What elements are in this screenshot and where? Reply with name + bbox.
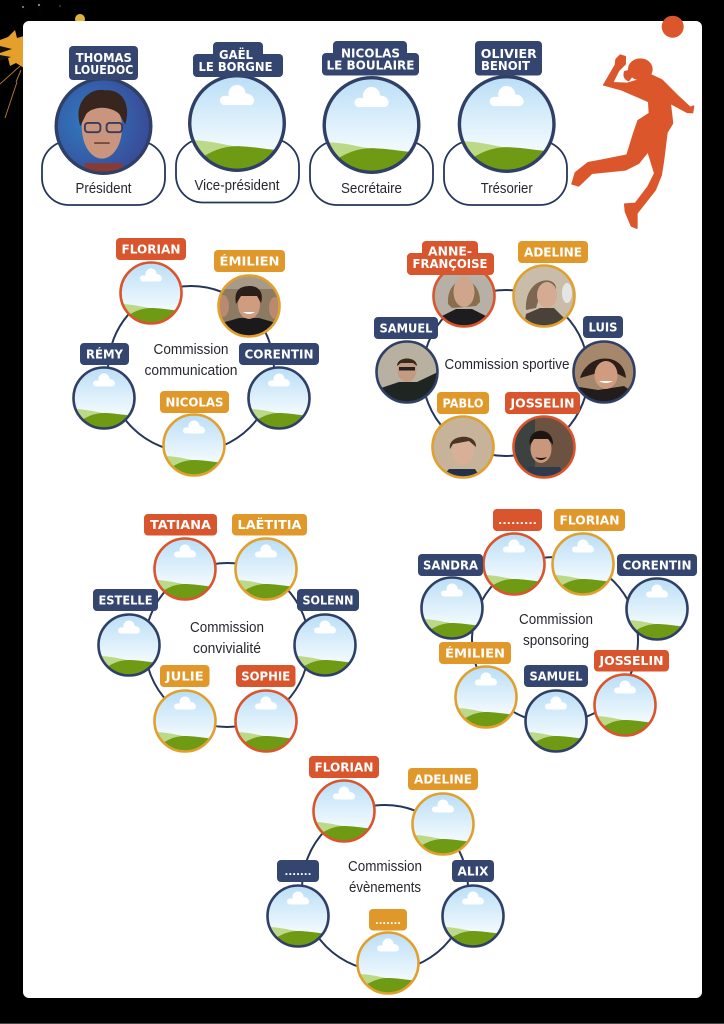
- member: Rémy: [72, 343, 136, 430]
- name tag: Thomas Louedoc: THOMAS: [76, 50, 132, 65]
- name tag: Olivier Benoit: [475, 41, 542, 76]
- member: Sandra: [418, 554, 484, 640]
- member: Sophie: SOPHIE: [241, 668, 290, 684]
- name tag: Nicolas Le Boulaire: NICOLAS: [341, 46, 400, 60]
- panel: commission communication: communication: [144, 362, 238, 379]
- panel: commission sponsoring: [418, 509, 697, 753]
- member: Josselin (photo): JOSSELIN: [510, 396, 574, 410]
- member: unnamed (navy): .......: [284, 867, 312, 878]
- member: Anne-Françoise (photo): ANNE-: [428, 244, 472, 258]
- role: Président: Président: [76, 180, 132, 197]
- panel: commission convivialité: [93, 514, 359, 753]
- member: unnamed (navy): [266, 860, 330, 948]
- member: Anne-Françoise (photo): [407, 241, 495, 327]
- member: Émilien (photo): [214, 250, 285, 337]
- member: Julie: JULIE: [165, 668, 204, 684]
- member: Alix: [441, 860, 505, 948]
- panel: commission communication: [72, 238, 319, 477]
- role: Vice-président: Vice-président: [194, 177, 280, 194]
- member: Samuel: [524, 665, 588, 753]
- member: Luis (photo): LUIS: [588, 320, 618, 334]
- member: Nicolas: [160, 391, 229, 477]
- member: Samuel (photo): SAMUEL: [380, 320, 433, 336]
- panel: commission sponsoring: sponsoring: [523, 632, 589, 649]
- member: Josselin: JOSSELIN: [599, 653, 664, 668]
- decorative paint splatter: [0, 4, 85, 118]
- member: Samuel: SAMUEL: [530, 668, 583, 684]
- member: Tatiana: [144, 514, 217, 601]
- member: Émilien: [439, 642, 518, 729]
- panel: commission sportive: [374, 241, 635, 478]
- name tag: Thomas Louedoc: LOUEDOC: [74, 62, 133, 77]
- card: Secrétaire: [310, 41, 433, 205]
- member: Solenn: [293, 589, 359, 677]
- panel: commission évènements: [266, 756, 505, 995]
- name tag: Thomas Louedoc: [69, 46, 138, 80]
- member: Corentin: [239, 343, 319, 430]
- member: Sandra: SANDRA: [423, 558, 478, 572]
- member: Nicolas: NICOLAS: [166, 394, 224, 410]
- member: Pablo (photo): [432, 392, 494, 478]
- member: Anne-Françoise (photo): FRANÇOISE: [412, 256, 488, 271]
- member: Josselin (photo): [505, 392, 580, 478]
- member: Florian: FLORIAN: [314, 760, 374, 774]
- member: Adeline (photo): ADELINE: [524, 244, 582, 260]
- member: Corentin: CORENTIN: [244, 346, 314, 362]
- member: Florian: FLORIAN: [122, 242, 180, 256]
- role: Trésorier: Trésorier: [481, 180, 533, 197]
- placeholder portrait: [322, 75, 421, 175]
- name tag: Nicolas Le Boulaire: [322, 41, 419, 76]
- panel: commission évènements: évènements: [349, 879, 421, 896]
- member: unnamed (amber): .......: [375, 916, 401, 927]
- member: Adeline (photo): [513, 241, 588, 327]
- member: Florian: FLORIAN: [560, 512, 620, 528]
- icon: volleyball player silhouette: [572, 55, 694, 228]
- member: Rémy: RÉMY: [86, 346, 124, 362]
- member: Samuel (photo): [374, 317, 438, 403]
- member: Alix: ALIX: [458, 864, 489, 878]
- icon: volleyball ball: [662, 16, 684, 38]
- name tag: Gaël Le Borgne: LE BORGNE: [198, 59, 272, 74]
- name tag: Gaël Le Borgne: GAËL: [219, 47, 253, 62]
- member: unnamed (amber): [356, 909, 420, 995]
- member: Florian: [309, 756, 379, 843]
- member: Laëtitia: LAËTITIA: [238, 517, 302, 532]
- photo: Thomas Louedoc: [55, 78, 152, 174]
- card: Président: [42, 46, 165, 205]
- heading: sponsoring: Commission: [519, 611, 593, 628]
- heading: évènements: Commission: [348, 858, 422, 875]
- heading: sportive: Commission sportive: [444, 356, 570, 373]
- member: Laëtitia: [232, 514, 307, 601]
- member: unnamed (red): .........: [498, 516, 537, 527]
- card: Vice-président: [176, 42, 299, 202]
- member: Émilien (photo): ÉMILIEN: [220, 254, 280, 268]
- panel: commission convivialité: convivialité: [193, 640, 261, 657]
- placeholder portrait: [187, 73, 287, 173]
- name tag: Olivier Benoit: BENOIT: [481, 58, 530, 73]
- member: Julie: [153, 665, 217, 753]
- member: Solenn: SOLENN: [302, 592, 354, 608]
- member: Estelle: ESTELLE: [98, 592, 152, 608]
- name tag: Nicolas Le Boulaire: LE BOULAIRE: [326, 58, 414, 72]
- member: Corentin: [617, 554, 697, 641]
- panel: bureau: [42, 41, 567, 205]
- member: Estelle: [93, 589, 161, 677]
- member: Adeline: ADELINE: [414, 772, 472, 786]
- member: Corentin: CORENTIN: [622, 558, 692, 572]
- placeholder portrait: [457, 74, 556, 174]
- card: Trésorier: [444, 41, 567, 205]
- member: unnamed (red): [482, 509, 546, 596]
- member: Émilien: ÉMILIEN: [445, 646, 505, 660]
- member: Luis (photo): [573, 316, 635, 403]
- member: Florian: [551, 509, 625, 596]
- member: Sophie: [234, 665, 298, 753]
- member: Tatiana: TATIANA: [150, 517, 211, 532]
- member: Pablo (photo): PABLO: [442, 396, 484, 410]
- heading: communication: Commission: [154, 341, 228, 358]
- role: Secrétaire: Secrétaire: [341, 180, 402, 197]
- member: Florian: [116, 238, 186, 325]
- heading: convivialité: Commission: [190, 619, 264, 636]
- member: Adeline: [408, 768, 478, 856]
- name tag: Gaël Le Borgne: [193, 42, 283, 77]
- name tag: Olivier Benoit: OLIVIER: [481, 46, 537, 61]
- member: Josselin: [593, 650, 669, 737]
